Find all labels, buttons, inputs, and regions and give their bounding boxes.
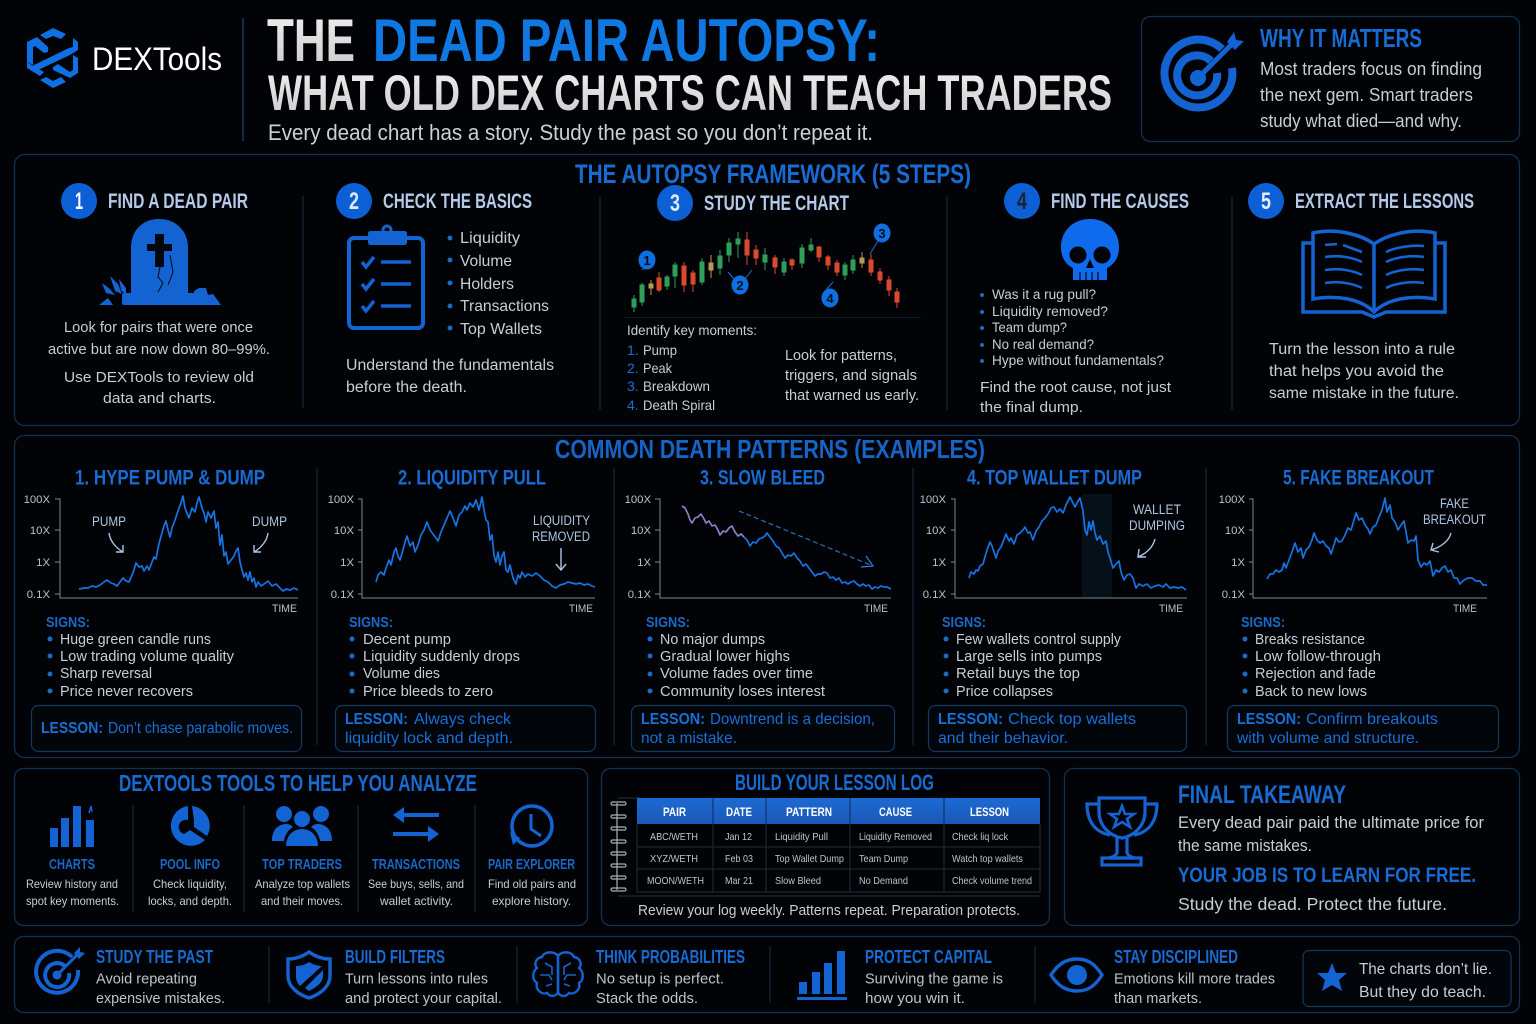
lesson log table: Jan 12 — [725, 831, 752, 843]
panel: lesson log — [602, 768, 1050, 926]
chart: liquidity pull: TIME — [569, 603, 593, 615]
step 2 checklist: Volume — [460, 253, 512, 270]
step 5 text: that helps you avoid the — [1269, 363, 1444, 380]
lesson box 5: Confirm breakouts — [1306, 711, 1438, 728]
lesson log table: LESSON — [970, 805, 1009, 819]
causes list: Hype without fundamentals? — [992, 353, 1164, 368]
pattern 2: liquidity pull — [328, 466, 596, 752]
tool: transactions: See buys, sells, and — [368, 877, 464, 891]
principle: study the past: STUDY THE PAST — [96, 947, 213, 967]
step 2: check the basics: CHECK THE BASICS — [383, 190, 532, 213]
lesson log table: Slow Bleed — [775, 875, 821, 887]
step 3 text: that warned us early. — [785, 388, 919, 404]
step 2 checklist: Transactions — [460, 298, 549, 315]
lesson log caption: Review your log weekly. Patterns repeat. Preparation protects. — [638, 903, 1020, 919]
lesson log table: ABC/WETH — [650, 831, 698, 843]
panel: final takeaway — [1064, 768, 1520, 926]
notebook spiral — [611, 798, 1040, 896]
lesson box 3: not a mistake. — [641, 730, 737, 747]
principle: build filters: BUILD FILTERS — [345, 947, 445, 967]
signs list 1: Huge green candle runs — [60, 632, 211, 648]
signs list 4 — [942, 615, 1122, 700]
callout: the charts don't lie: The charts don’t lie. — [1359, 961, 1492, 978]
lesson box 5: LESSON: — [1237, 711, 1301, 728]
signs list 2: SIGNS: — [349, 615, 393, 631]
candlestick chart: 3 — [878, 226, 886, 241]
candlestick chart: 2 — [736, 278, 744, 293]
signs list 1: Sharp reversal — [60, 666, 152, 682]
icon: open book — [1303, 231, 1445, 317]
icon: tombstone — [99, 219, 221, 305]
panel: DEXTools tools — [14, 768, 588, 926]
pattern 1: hype pump and dump — [24, 466, 302, 752]
lesson box 4: Check top wallets — [1008, 711, 1136, 728]
panel: autopsy framework — [14, 154, 1520, 426]
tool: charts: spot key moments. — [26, 894, 119, 908]
step 5 text: Turn the lesson into a rule — [1269, 341, 1455, 358]
callout: the charts don't lie: But they do teach. — [1359, 984, 1486, 1001]
lesson log table: Check liq lock — [952, 831, 1009, 843]
lesson log table: Liquidity Removed — [859, 831, 932, 843]
icon: rising bars — [797, 951, 847, 1000]
chart: fake breakout: 1X — [1231, 557, 1245, 569]
tool: transactions: TRANSACTIONS — [372, 857, 460, 873]
principle: protect capital: how you win it. — [865, 990, 965, 1007]
tool: top traders — [255, 806, 350, 908]
pattern 2: liquidity pull: 2. LIQUIDITY PULL — [398, 466, 546, 490]
step 1: find a dead pair: 1 — [75, 188, 83, 215]
title: DEAD PAIR AUTOPSY: — [373, 7, 880, 74]
icon: people — [272, 806, 332, 846]
signs list 3: Community loses interest — [660, 684, 825, 700]
principle: think probabilities: THINK PROBABILITIES — [596, 947, 745, 967]
step 4 text: the final dump. — [980, 399, 1083, 416]
lesson box 1: LESSON: — [41, 720, 103, 737]
tool: pool info: locks, and depth. — [148, 894, 232, 908]
chart: liquidity pull: 100X — [328, 494, 354, 506]
step 5 text: same mistake in the future. — [1269, 385, 1459, 402]
chart: top wallet dump: WALLET — [1133, 502, 1181, 517]
title — [267, 7, 1112, 121]
icon: trophy — [1087, 798, 1157, 865]
step 2 checklist: Top Wallets — [460, 321, 542, 338]
lesson log table: XYZ/WETH — [650, 853, 698, 865]
principle: stay disciplined: than markets. — [1114, 990, 1202, 1007]
causes list: Was it a rug pull? — [992, 287, 1096, 302]
chart: liquidity pull: 0.1X — [331, 589, 354, 601]
chart: fake breakout: BREAKOUT — [1423, 512, 1486, 527]
principle: stay disciplined — [1051, 947, 1275, 1007]
key moments list: Death Spiral — [643, 397, 715, 413]
chart: slow bleed — [625, 494, 891, 615]
step 4: find the causes: 4 — [1017, 188, 1027, 215]
signs list 5 — [1241, 615, 1381, 700]
chart: top wallet dump: 10X — [926, 525, 946, 537]
subtitle: Every dead chart has a story. Study the past so you don’t repeat it. — [268, 120, 873, 145]
chart: hype pump and dump: TIME — [272, 603, 297, 615]
takeaway text: the same mistakes. — [1178, 837, 1312, 855]
principle: think probabilities — [533, 947, 745, 1007]
tool: pair explorer: PAIR EXPLORER — [488, 857, 575, 873]
icon: star — [1317, 963, 1347, 991]
heading: lesson log: BUILD YOUR LESSON LOG — [735, 770, 934, 795]
signs list 1: SIGNS: — [46, 615, 90, 631]
pattern 5: fake breakout: 5. FAKE BREAKOUT — [1283, 466, 1434, 490]
step 5: extract the lessons: 5 — [1261, 188, 1271, 215]
tool: charts: Review history and — [26, 877, 118, 891]
why it matters text: study what died—and why. — [1260, 110, 1462, 131]
signs list 5: Back to new lows — [1255, 684, 1367, 700]
signs list 4: Price collapses — [956, 684, 1053, 700]
step 4: find the causes — [980, 183, 1189, 416]
signs list 5: SIGNS: — [1241, 615, 1285, 631]
icon: target with arrow — [1164, 32, 1244, 108]
step 3: study the chart: 3 — [670, 190, 680, 217]
callout: the charts don't lie — [1303, 950, 1511, 1006]
panel: why it matters: WHY IT MATTERS — [1260, 23, 1422, 53]
step 2 checklist — [448, 230, 549, 338]
signs list 3: SIGNS: — [646, 615, 690, 631]
principle: build filters: Turn lessons into rules — [345, 970, 488, 988]
why it matters text: the next gem. Smart traders — [1260, 84, 1473, 105]
chart: top wallet dump: 0.1X — [923, 589, 946, 601]
pattern 3: slow bleed: 3. SLOW BLEED — [700, 466, 825, 490]
key moments list: Identify key moments: — [627, 322, 757, 338]
step 3: study the chart: STUDY THE CHART — [704, 192, 849, 215]
signs list 3: Gradual lower highs — [660, 649, 790, 665]
principle: study the past: expensive mistakes. — [96, 990, 225, 1007]
key moments list: 2. — [627, 360, 639, 376]
causes list: No real demand? — [992, 337, 1094, 352]
step 3: study the chart — [625, 185, 921, 413]
icon: skull — [1061, 219, 1119, 280]
signs list 5: Breaks resistance — [1255, 632, 1365, 648]
chart: fake breakout: 100X — [1219, 494, 1245, 506]
signs list 1 — [46, 615, 235, 700]
step 4 text: Find the root cause, not just — [980, 379, 1172, 396]
lesson log table: MOON/WETH — [647, 875, 704, 887]
chart: hype pump and dump: DUMP — [252, 514, 287, 529]
step 5 text — [1269, 341, 1459, 402]
pattern 4: top wallet dump: 4. TOP WALLET DUMP — [967, 466, 1142, 490]
chart: hype pump and dump: 100X — [24, 494, 50, 506]
tool: top traders: TOP TRADERS — [262, 857, 342, 873]
tool: pool info: Check liquidity, — [153, 877, 227, 891]
signs list 2: Volume dies — [363, 666, 440, 682]
principle: protect capital: PROTECT CAPITAL — [865, 947, 992, 967]
lesson box 2: LESSON: — [345, 711, 408, 728]
heading: framework: THE AUTOPSY FRAMEWORK (5 STEPS) — [575, 159, 971, 189]
lesson log table: Check volume trend — [952, 875, 1032, 887]
logo: DEXTools: DEXTools — [92, 41, 222, 77]
step 5: extract the lessons — [1248, 183, 1474, 402]
icon: brain — [533, 952, 583, 996]
panel: final takeaway: FINAL TAKEAWAY — [1178, 781, 1346, 809]
pattern 3: slow bleed — [625, 466, 894, 752]
chart: slow bleed: 0.1X — [628, 589, 651, 601]
icon: history clock — [510, 806, 552, 846]
lesson box 3: LESSON: — [641, 711, 705, 728]
pattern 1: hype pump and dump: 1. HYPE PUMP & DUMP — [75, 466, 265, 490]
key moments list: Pump — [643, 342, 677, 358]
causes list: Team dump? — [992, 320, 1067, 335]
panel: common death patterns — [14, 434, 1520, 758]
step 2 text: Understand the fundamentals — [346, 357, 554, 374]
tool: pair explorer — [488, 806, 576, 908]
tool: transactions — [368, 807, 464, 908]
chart: top wallet dump: 1X — [932, 557, 946, 569]
causes list — [980, 287, 1164, 368]
lesson log table: DATE — [726, 805, 752, 819]
lesson log table: Liquidity Pull — [775, 831, 828, 843]
lesson box 4 — [928, 706, 1186, 752]
tool: pool info: POOL INFO — [160, 857, 220, 873]
causes list: Liquidity removed? — [992, 304, 1108, 319]
lesson box 5: with volume and structure. — [1236, 730, 1419, 747]
why it matters text: Most traders focus on finding — [1260, 58, 1482, 79]
tool: top traders: Analyze top wallets — [255, 877, 350, 891]
step 1 text: data and charts. — [103, 390, 216, 407]
chart: liquidity pull: REMOVED — [532, 529, 590, 544]
icon: clipboard — [349, 226, 423, 328]
lesson box 4: and their behavior. — [938, 730, 1068, 747]
lesson box 2: liquidity lock and depth. — [345, 730, 513, 747]
chart: fake breakout — [1219, 494, 1487, 615]
step 3 text: Look for patterns, — [785, 348, 897, 364]
lesson box 5 — [1228, 706, 1498, 752]
lesson box 1: Don’t chase parabolic moves. — [108, 720, 293, 737]
icon: bar chart — [50, 806, 94, 847]
tool: pair explorer: explore history. — [492, 894, 571, 908]
step 4 text — [980, 379, 1172, 416]
chart: slow bleed: 10X — [631, 525, 651, 537]
lesson log table: Top Wallet Dump — [775, 853, 844, 865]
panel: why it matters — [1142, 16, 1520, 142]
title: THE — [267, 7, 355, 74]
panel: final takeaway: YOUR JOB IS TO LEARN FOR FREE. — [1178, 864, 1476, 887]
key moments list — [627, 322, 757, 413]
key moments list: 3. — [627, 378, 639, 394]
step 1 text: Look for pairs that were once — [64, 319, 253, 336]
icon: eye — [1051, 959, 1102, 991]
lesson box 4: LESSON: — [938, 711, 1003, 728]
key moments list: 1. — [627, 342, 639, 358]
tool: pair explorer: Find old pairs and — [488, 877, 576, 891]
lesson log table: No Demand — [859, 875, 908, 887]
chart: slow bleed: TIME — [864, 603, 888, 615]
key moments list: Breakdown — [643, 378, 710, 394]
step 1 text: active but are now down 80–99%. — [48, 341, 270, 358]
step 4: find the causes: FIND THE CAUSES — [1051, 190, 1189, 213]
principle: study the past — [36, 947, 225, 1007]
lesson box 1 — [32, 706, 302, 752]
heading: tools: DEXTOOLS TOOLS TO HELP YOU ANALYZE — [119, 770, 477, 796]
icon: small target — [36, 947, 85, 993]
step 2: check the basics: 2 — [349, 188, 359, 215]
chart: fake breakout: FAKE — [1440, 496, 1469, 511]
principle: protect capital — [797, 947, 1003, 1007]
signs list 4: Retail buys the top — [956, 666, 1080, 682]
candlestick chart: 4 — [826, 291, 834, 306]
chart: slow bleed: 1X — [637, 557, 651, 569]
principle: stay disciplined: Emotions kill more trades — [1114, 970, 1275, 988]
takeaway text: Every dead pair paid the ultimate price for — [1178, 814, 1484, 832]
lesson log table: Mar 21 — [725, 875, 753, 887]
tool: pool info — [148, 806, 232, 908]
chart: liquidity pull: LIQUIDITY — [533, 513, 590, 528]
chart: top wallet dump: 100X — [920, 494, 946, 506]
candlestick chart — [625, 224, 921, 318]
chart: hype pump and dump: 1X — [36, 557, 50, 569]
chart: top wallet dump: DUMPING — [1129, 518, 1185, 533]
lesson log table: PATTERN — [786, 805, 832, 819]
signs list 1: Low trading volume quality — [60, 649, 235, 665]
signs list 2: Price bleeds to zero — [363, 684, 493, 700]
signs list 3 — [646, 615, 825, 700]
step 2: check the basics — [336, 183, 554, 396]
signs list 4: Few wallets control supply — [956, 632, 1122, 648]
header divider — [242, 18, 244, 141]
principle: study the past: Avoid repeating — [96, 970, 197, 988]
step 1 text: Use DEXTools to review old — [64, 369, 254, 386]
chart: hype pump and dump: 0.1X — [27, 589, 50, 601]
step 2 checklist: Liquidity — [460, 230, 520, 247]
pattern 5: fake breakout — [1219, 466, 1498, 752]
lesson box 2: Always check — [414, 711, 512, 728]
lesson box 2 — [336, 706, 596, 752]
chart: liquidity pull: 1X — [340, 557, 354, 569]
lesson log table — [637, 798, 1040, 892]
principle: think probabilities: No setup is perfect. — [596, 970, 724, 988]
lesson log table: PAIR — [663, 805, 686, 819]
step 1: find a dead pair: FIND A DEAD PAIR — [108, 190, 248, 213]
panel: bottom principles strip — [14, 936, 1520, 1012]
tool: charts: CHARTS — [49, 857, 95, 873]
signs list 4: Large sells into pumps — [956, 649, 1102, 665]
step 2 text: before the death. — [346, 379, 467, 396]
chart: liquidity pull: 10X — [334, 525, 354, 537]
pattern 4: top wallet dump — [920, 466, 1187, 752]
principle: build filters — [288, 947, 502, 1007]
chart: hype pump and dump — [24, 494, 298, 615]
principle: think probabilities: Stack the odds. — [596, 990, 698, 1007]
step 3 text — [785, 348, 919, 404]
chart: fake breakout: TIME — [1453, 603, 1477, 615]
signs list 2 — [349, 615, 520, 700]
icon: arrows — [393, 807, 439, 842]
tool: charts — [26, 806, 119, 908]
principle: stay disciplined: STAY DISCIPLINED — [1114, 947, 1238, 967]
lesson box 3 — [632, 706, 894, 752]
chart: fake breakout: 0.1X — [1222, 589, 1245, 601]
principle: build filters: and protect your capital. — [345, 990, 502, 1007]
step 1: find a dead pair — [48, 183, 270, 407]
key moments list: 4. — [627, 397, 639, 413]
signs list 5: Low follow-through — [1255, 649, 1381, 665]
step 1 text — [48, 319, 270, 407]
candlestick chart: 1 — [643, 253, 651, 268]
signs list 2: Decent pump — [363, 632, 451, 648]
tool: top traders: and their moves. — [261, 894, 343, 908]
principle: protect capital: Surviving the game is — [865, 970, 1003, 988]
lesson log table: Team Dump — [859, 853, 908, 865]
chart: hype pump and dump: 10X — [30, 525, 50, 537]
signs list 4: SIGNS: — [942, 615, 986, 631]
chart: fake breakout: 10X — [1225, 525, 1245, 537]
lesson log table: Watch top wallets — [952, 853, 1023, 865]
icon: shield — [288, 952, 330, 998]
key moments list: Peak — [643, 360, 673, 376]
takeaway text — [1178, 814, 1484, 855]
icon: pie chart — [171, 806, 210, 846]
chart: liquidity pull — [328, 494, 595, 615]
signs list 5: Rejection and fade — [1255, 666, 1376, 682]
tool: transactions: wallet activity. — [379, 894, 453, 908]
heading: death patterns: COMMON DEATH PATTERNS (EXAMPLES) — [555, 434, 985, 464]
step 3 text: triggers, and signals — [785, 368, 917, 384]
step 2 checklist: Holders — [460, 276, 514, 293]
step 2 text — [346, 357, 554, 396]
panel: final takeaway: Study the dead. Protect the future. — [1178, 894, 1447, 914]
chart: hype pump and dump: PUMP — [92, 514, 126, 529]
title: WHAT OLD DEX CHARTS CAN TEACH TRADERS — [268, 65, 1112, 121]
signs list 1: Price never recovers — [60, 684, 193, 700]
logo: DEXTools — [27, 28, 222, 88]
lesson log table: Feb 03 — [725, 853, 753, 865]
lesson log table: CAUSE — [879, 805, 912, 819]
chart: slow bleed: 100X — [625, 494, 651, 506]
chart: top wallet dump: TIME — [1159, 603, 1183, 615]
signs list 2: Liquidity suddenly drops — [363, 649, 520, 665]
why it matters text — [1260, 58, 1482, 131]
signs list 3: No major dumps — [660, 632, 765, 648]
lesson box 3: Downtrend is a decision, — [710, 711, 875, 728]
signs list 3: Volume fades over time — [660, 666, 813, 682]
chart: top wallet dump — [920, 494, 1187, 615]
